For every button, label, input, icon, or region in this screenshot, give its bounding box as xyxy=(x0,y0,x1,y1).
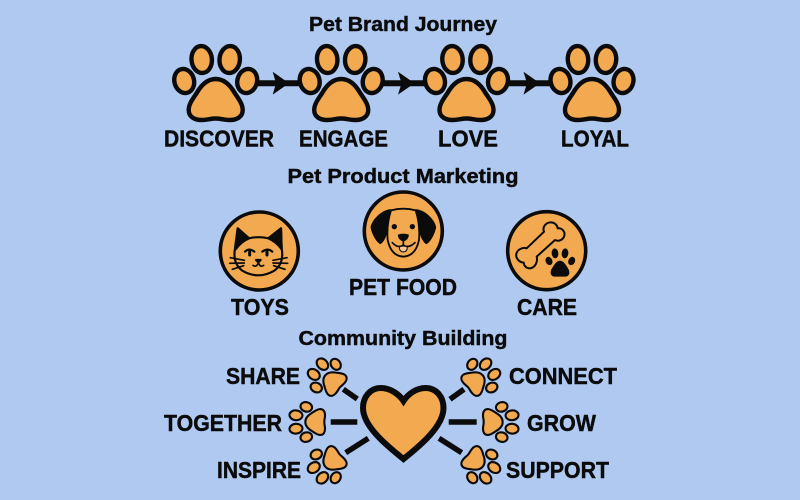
icon: paw engage xyxy=(297,45,385,120)
icon: small paw bottom-right xyxy=(454,438,509,493)
icon: small paw top-right xyxy=(454,349,509,404)
label: GROW: GROW xyxy=(527,410,596,436)
icon: cat circle xyxy=(220,212,298,290)
icon: paw love xyxy=(422,45,511,120)
label: PET FOOD: PET FOOD xyxy=(349,274,457,300)
icon: paw discover xyxy=(172,45,260,120)
label: CONNECT: CONNECT xyxy=(509,363,617,389)
icon: small paw top-left xyxy=(299,349,354,404)
icon: small paw bottom-left xyxy=(299,438,354,493)
title: Community Building: Community Building xyxy=(298,327,508,350)
label: DISCOVER: DISCOVER xyxy=(164,126,274,152)
label: TOYS: TOYS xyxy=(231,294,289,320)
label: SUPPORT: SUPPORT xyxy=(506,457,609,483)
label: CARE: CARE xyxy=(517,294,577,320)
icon: bone and paw circle xyxy=(508,212,586,290)
journey arrows xyxy=(250,72,561,95)
icon: small paw middle-right xyxy=(483,401,519,443)
icon: dog circle xyxy=(364,192,442,270)
label: INSPIRE: INSPIRE xyxy=(217,457,301,483)
label: SHARE: SHARE xyxy=(226,363,300,389)
icon: heart xyxy=(363,388,444,459)
title: Pet Brand Journey: Pet Brand Journey xyxy=(309,13,498,36)
label: LOYAL: LOYAL xyxy=(561,126,629,152)
label: LOVE: LOVE xyxy=(438,126,498,152)
title: Pet Product Marketing: Pet Product Marketing xyxy=(288,165,518,188)
label: ENGAGE: ENGAGE xyxy=(299,126,388,152)
icon: small paw middle-left xyxy=(289,401,325,443)
label: TOGETHER: TOGETHER xyxy=(164,410,282,436)
connector lines xyxy=(331,389,477,453)
icon: paw loyal xyxy=(548,45,636,120)
